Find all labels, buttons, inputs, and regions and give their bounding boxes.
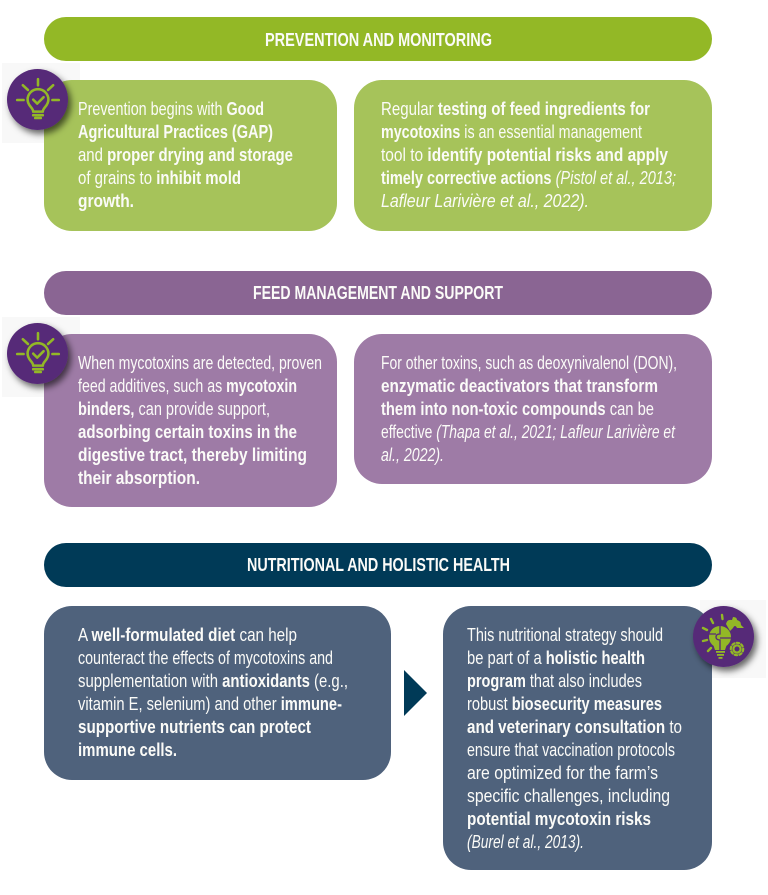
heading: feed management and support: FEED MANAGEMENT AND SUPPORT (253, 283, 503, 303)
panel: holistic health program (443, 606, 712, 870)
panel: well-formulated diet: vitamin E, selenium) and other immune- (78, 693, 342, 714)
decorative icon halos (2, 63, 766, 678)
heading: prevention and monitoring (44, 17, 712, 61)
panel: mycotoxin binders: digestive tract, thereby limiting (78, 444, 307, 465)
panel: enzymatic deactivators: them into non-toxic compounds can be (381, 398, 654, 419)
panel: well-formulated diet: supplementation with antioxidants (e.g., (78, 670, 348, 691)
panel: well-formulated diet (44, 606, 391, 780)
panel: good agricultural practices: of grains to inhibit mold (78, 167, 241, 188)
panel: good agricultural practices: growth. (78, 190, 134, 211)
panel: testing of feed ingredients: Lafleur Larivière et al., 2022). (381, 190, 589, 211)
icon: lightbulb with check, prevention (7, 69, 68, 130)
panel: holistic health program: are optimized for the farm’s (467, 762, 658, 783)
panel: enzymatic deactivators: For other toxins, such as deoxynivalenol (DON), (381, 352, 677, 373)
panel: enzymatic deactivators (354, 334, 712, 484)
panel: mycotoxin binders: their absorption. (78, 467, 200, 488)
panel: good agricultural practices: and proper drying and storage (78, 144, 293, 165)
panel: holistic health program: ensure that vaccination protocols (467, 739, 675, 760)
panel: holistic health program: and veterinary consultation to (467, 716, 682, 737)
panel: testing of feed ingredients (354, 80, 712, 231)
panel: enzymatic deactivators: enzymatic deactivators that transform (381, 375, 658, 396)
heading: nutritional and holistic health (44, 543, 712, 587)
panel: enzymatic deactivators: effective (Thapa et al., 2021; Lafleur Larivière et (381, 421, 676, 442)
panel: holistic health program: This nutritional strategy should (467, 624, 663, 645)
panel: good agricultural practices: Prevention begins with Good (78, 98, 264, 119)
icon: puzzle lightbulb with gear (693, 606, 754, 667)
panel: holistic health program: robust biosecurity measures (467, 693, 662, 714)
panel: holistic health program: (Burel et al., 2013). (467, 831, 584, 852)
panel: testing of feed ingredients: Regular testing of feed ingredients for (381, 98, 650, 119)
panel: enzymatic deactivators: al., 2022). (381, 444, 444, 465)
panel: good agricultural practices: Agricultural Practices (GAP) (78, 121, 273, 142)
panel: well-formulated diet: supportive nutrients can protect (78, 716, 311, 737)
icon: lightbulb with check, feed management (7, 323, 68, 384)
panel: testing of feed ingredients: mycotoxins is an essential management (381, 121, 642, 142)
panel: holistic health program: program that also includes (467, 670, 642, 691)
heading: nutritional and holistic health: NUTRITIONAL AND HOLISTIC HEALTH (247, 555, 510, 575)
panel: holistic health program: specific challenges, including (467, 785, 670, 806)
panel: holistic health program: be part of a holistic health (467, 647, 645, 668)
panel: mycotoxin binders (44, 334, 337, 507)
panel: testing of feed ingredients: timely corrective actions (Pistol et al., 2013; (381, 167, 676, 188)
arrow (404, 670, 427, 716)
panel: mycotoxin binders: binders, can provide support, (78, 398, 270, 419)
panel: well-formulated diet: A well-formulated diet can help (78, 624, 297, 645)
heading: prevention and monitoring: PREVENTION AND MONITORING (265, 30, 492, 50)
heading: feed management and support (44, 271, 712, 315)
panel: holistic health program: potential mycotoxin risks (467, 808, 651, 829)
panel: testing of feed ingredients: tool to identify potential risks and apply (381, 144, 669, 165)
panel: good agricultural practices (44, 80, 337, 231)
panel: mycotoxin binders: adsorbing certain toxins in the (78, 421, 297, 442)
panel: mycotoxin binders: feed additives, such as mycotoxin (78, 375, 297, 396)
panel: well-formulated diet: immune cells. (78, 739, 177, 760)
panel: mycotoxin binders: When mycotoxins are detected, proven (78, 352, 322, 373)
panel: well-formulated diet: counteract the effects of mycotoxins and (78, 647, 333, 668)
